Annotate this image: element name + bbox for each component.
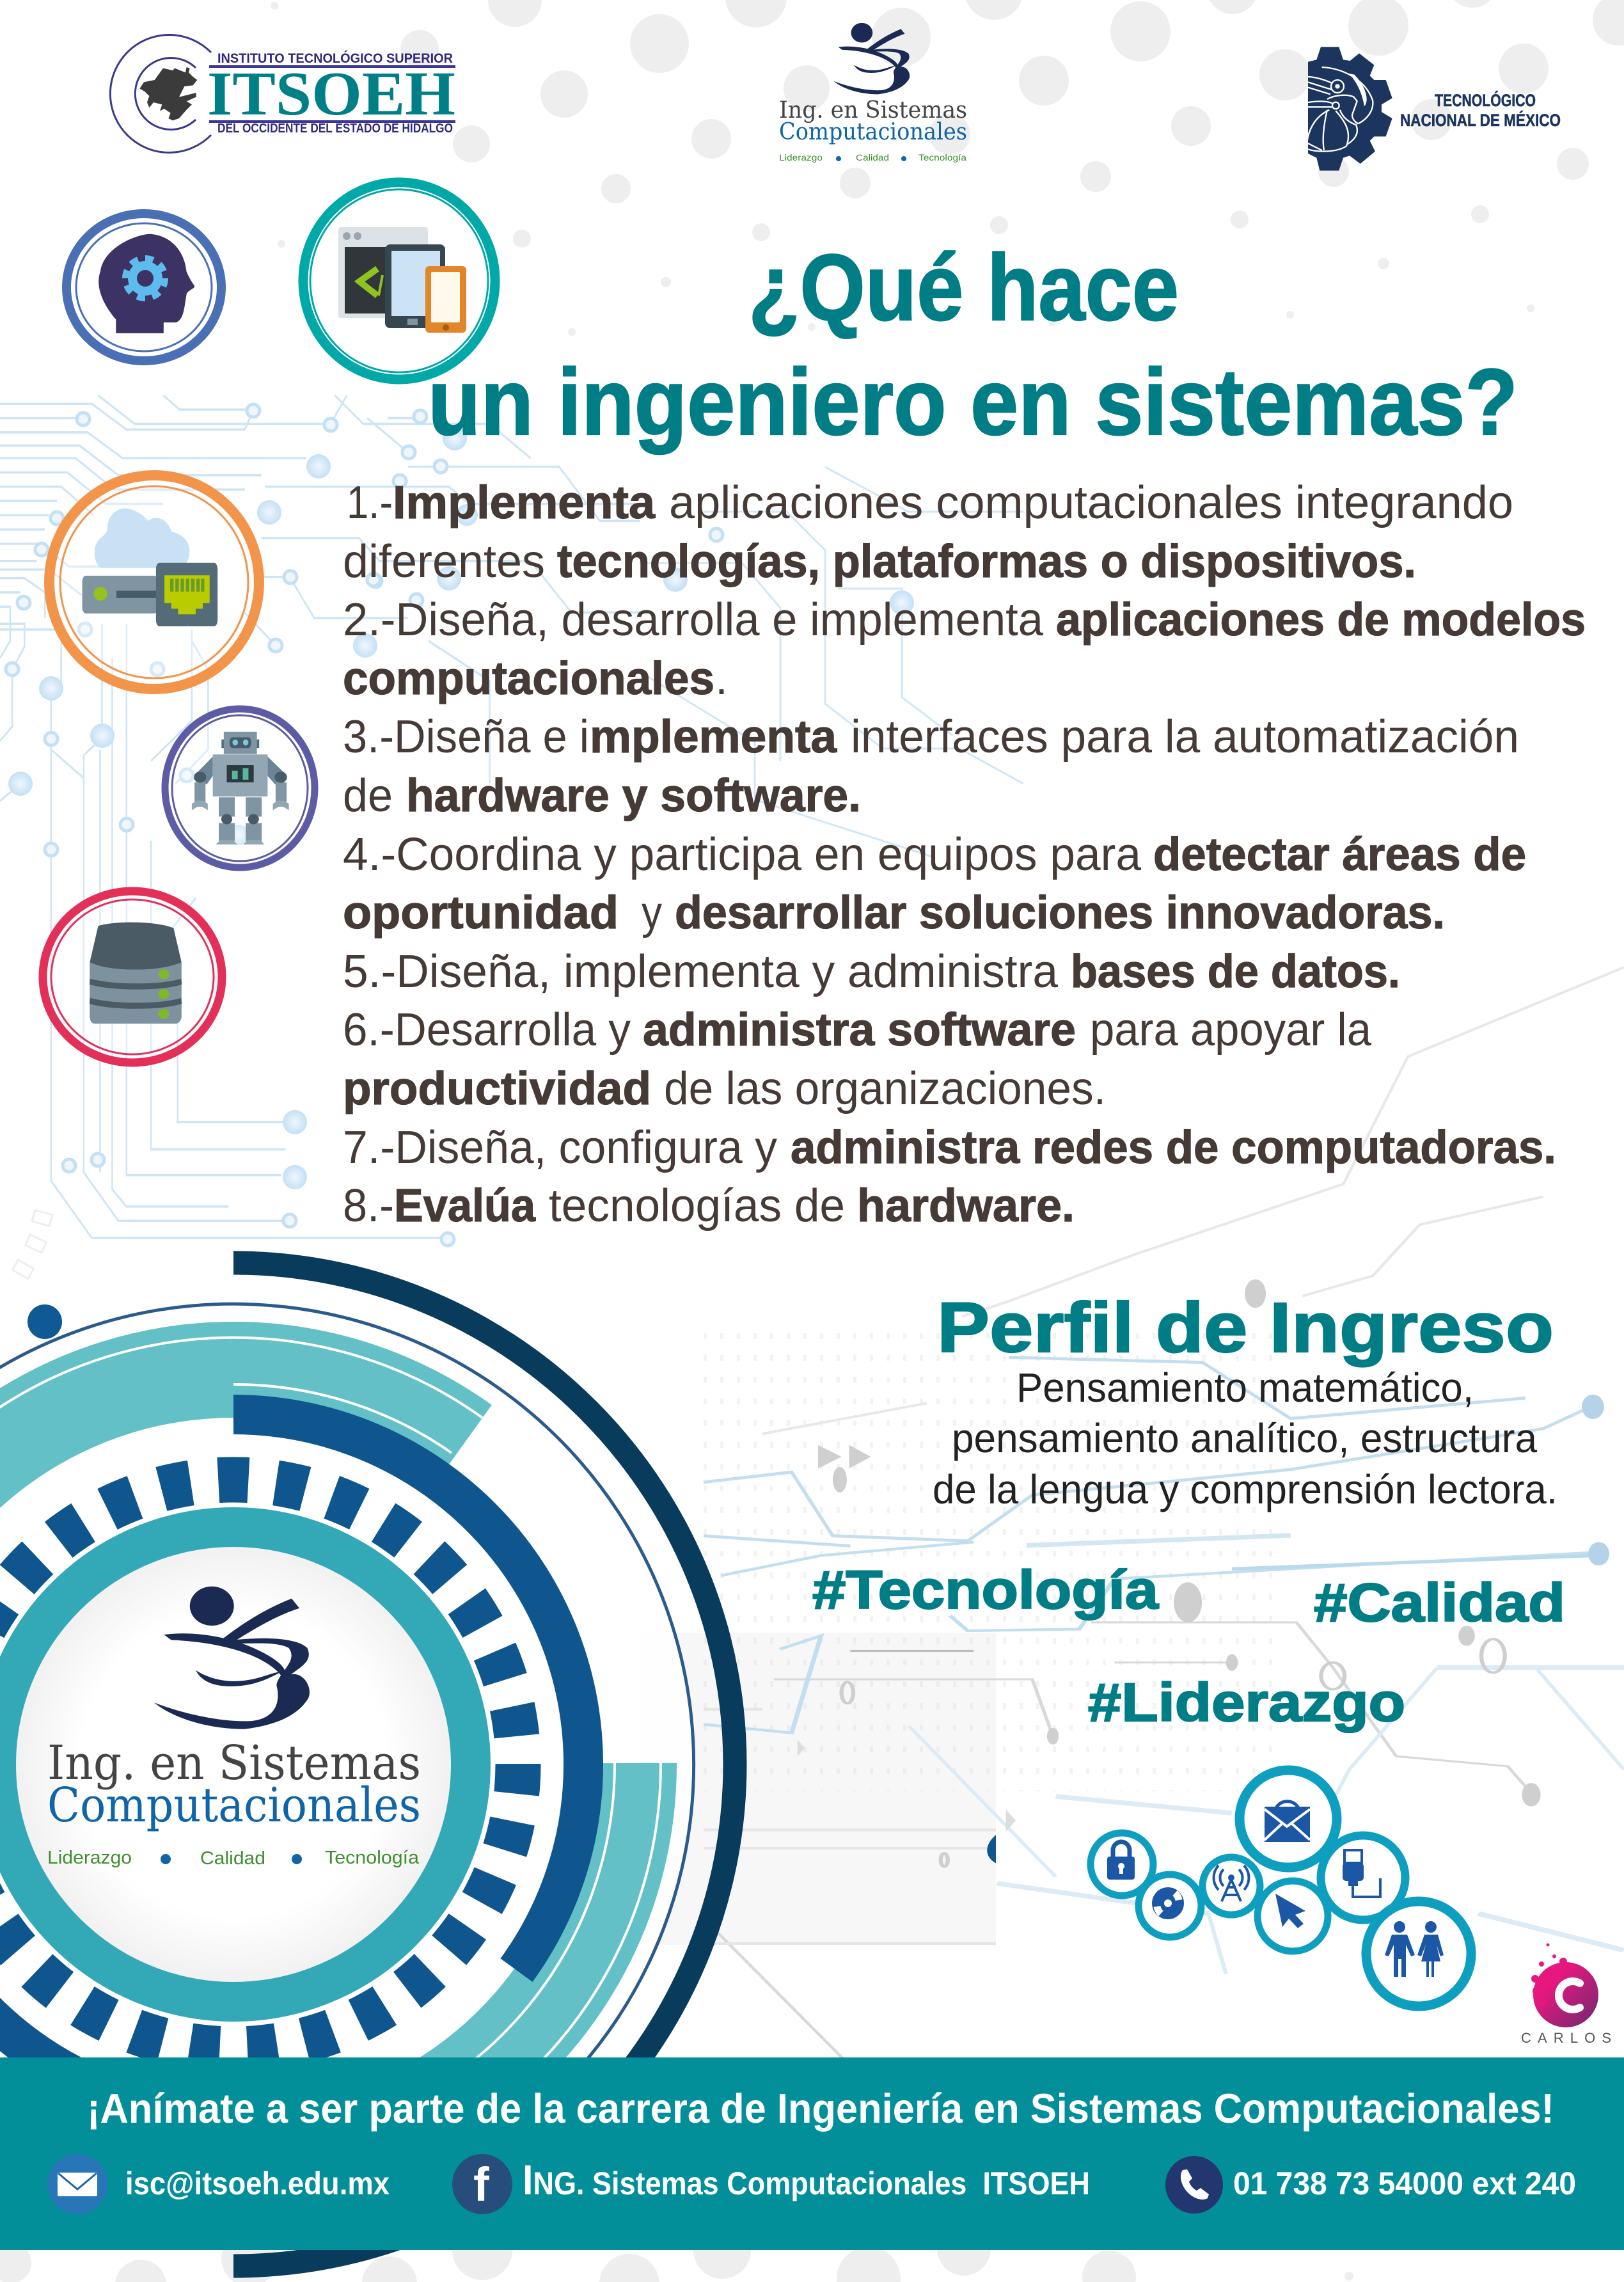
text block: eight skills list: 7.-Diseña, configura y	[343, 1122, 777, 1173]
text block: eight skills list: mplementa	[590, 711, 837, 763]
logo: ITSOEH: DEL OCCIDENTE DEL ESTADO DE HIDALGO	[217, 122, 453, 136]
text block: eight skills list: 1.-	[347, 477, 393, 528]
text: program name in circle: Ing. en Sistemas	[47, 1736, 421, 1791]
logo: Tecnológico Nacional de México: NACIONAL DE MÉXICO	[1400, 110, 1561, 130]
logo: large swoosh	[154, 1587, 310, 1729]
title: ¿Qué hace	[748, 235, 1179, 340]
logo: Ing. en Sistemas Computacionales small: Tecnología	[918, 152, 966, 162]
contact: phone: 01 738 73 54000 ext 240	[1233, 2166, 1576, 2201]
text block: eight skills list: Implementa	[393, 477, 656, 528]
text block: eight skills list: administra software	[643, 1004, 1076, 1056]
contact: email	[47, 2154, 390, 2214]
text block: eight skills list: Evalúa	[394, 1180, 536, 1232]
text block: eight skills list: aplicaciones de modelos	[1056, 594, 1586, 646]
text: program name in circle: Liderazgo	[47, 1848, 132, 1868]
logo: Ing. en Sistemas Computacionales small	[779, 23, 967, 162]
text block: eight skills list: hardware y software.	[406, 770, 861, 821]
text block: eight skills list: y	[642, 887, 662, 939]
icon: cloud server	[49, 475, 259, 689]
graphic: concentric tech rings	[0, 1263, 735, 2266]
contact: facebook	[452, 2154, 1090, 2214]
text block: eight skills list: administra redes de computadoras.	[791, 1122, 1556, 1173]
text block: eight skills list: diferentes	[343, 536, 545, 587]
text block: eight skills list: .	[715, 653, 728, 704]
logo: Ing. en Sistemas Computacionales small: Calidad	[856, 152, 889, 162]
text block: eight skills list: interfaces para la automatización	[851, 711, 1519, 763]
text block: eight skills list: hardware.	[857, 1180, 1075, 1232]
background: blue circuit traces	[0, 395, 1023, 1279]
logo: ITSOEH	[110, 35, 455, 152]
hashtags: #Tecnología	[812, 1560, 1159, 1620]
text block: eight skills list: tecnologías de	[549, 1180, 845, 1232]
text: program name in circle: Tecnología	[325, 1848, 420, 1868]
text block: eight skills list: computacionales	[343, 653, 714, 704]
icon: code devices	[303, 182, 495, 379]
text block: eight skills list: aplicaciones computacionales integrando	[669, 477, 1513, 528]
logo: ITSOEH: ITSOEH	[207, 59, 455, 128]
logo: Carlos	[1521, 1944, 1611, 2046]
logo: Ing. en Sistemas Computacionales small: Liderazgo	[779, 152, 823, 162]
text block: eight skills list: de las organizaciones.	[664, 1063, 1106, 1114]
logo: Carlos: CARLOS	[1521, 2030, 1611, 2046]
background: grey and blue network lines lower right	[640, 967, 1624, 2060]
text: program name in circle: Computacionales	[47, 1778, 421, 1833]
text block: eight skills list: 2.-Diseña, desarrolla e implementa	[343, 594, 1044, 646]
text block: eight skills list: bases de datos.	[1071, 946, 1400, 997]
logo: Ing. en Sistemas Computacionales small: Ing. en Sistemas	[779, 97, 967, 123]
hashtags	[812, 1560, 1565, 1732]
contact: facebook: ING. Sistemas Computacionales ITSOEH	[523, 2156, 1090, 2203]
text block: eight skills list: 4.-Coordina y participa en equipos para	[343, 829, 1142, 880]
text block: eight skills list: desarrollar soluciones innovadoras.	[675, 887, 1445, 939]
contact: phone	[1165, 2156, 1576, 2214]
contact: facebook: f	[473, 2158, 489, 2211]
text block: eight skills list: de	[343, 770, 393, 821]
text block: entry profile: pensamiento analítico, estructura	[952, 1415, 1537, 1461]
text block: eight skills list: 8.-	[343, 1180, 394, 1232]
text block: entry profile: Pensamiento matemático,	[1016, 1365, 1474, 1411]
logo: Tecnológico Nacional de México	[1307, 47, 1561, 171]
text block: eight skills list	[343, 477, 1586, 1232]
text: program name in circle: Calidad	[200, 1848, 265, 1869]
logo: Tecnológico Nacional de México: TECNOLÓGICO	[1435, 90, 1536, 110]
text block: eight skills list: 6.-Desarrolla y	[343, 1004, 631, 1056]
text block: eight skills list: 3.-Diseña e i	[343, 711, 589, 763]
text block: eight skills list: detectar áreas de	[1153, 829, 1526, 880]
logo: ITSOEH: INSTITUTO TECNOLÓGICO SUPERIOR	[217, 51, 453, 66]
title: un ingeniero en sistemas?	[428, 350, 1518, 455]
hashtags: #Calidad	[1314, 1573, 1565, 1633]
title	[428, 235, 1518, 455]
heading: Perfil de Ingreso: Perfil de Ingreso	[937, 1288, 1554, 1367]
contact: email: isc@itsoeh.edu.mx	[125, 2166, 390, 2201]
text: program name in circle	[47, 1736, 421, 1869]
icon: robot	[165, 709, 315, 868]
footer band	[0, 2057, 1624, 2250]
text block: eight skills list: 5.-Diseña, implementa y administra	[343, 946, 1059, 997]
text block: eight skills list: para apoyar la	[1090, 1004, 1372, 1056]
logo: Ing. en Sistemas Computacionales small: Computacionales	[779, 119, 967, 145]
icon: head with gear	[67, 214, 221, 361]
footer headline: ¡Anímate a ser parte de la carrera de Ingeniería en Sistemas Computacionales!	[87, 2085, 1554, 2132]
text block: entry profile: de la lengua y comprensión lectora.	[933, 1466, 1557, 1512]
icons: network bubbles	[1091, 1770, 1471, 2006]
icon: database	[43, 891, 222, 1063]
text block: eight skills list: tecnologías, plataformas o dispositivos.	[557, 536, 1416, 587]
text block: entry profile	[933, 1365, 1557, 1512]
text block: eight skills list: productividad	[343, 1063, 651, 1114]
text block: eight skills list: oportunidad	[343, 887, 619, 939]
hashtags: #Liderazgo	[1088, 1672, 1405, 1732]
